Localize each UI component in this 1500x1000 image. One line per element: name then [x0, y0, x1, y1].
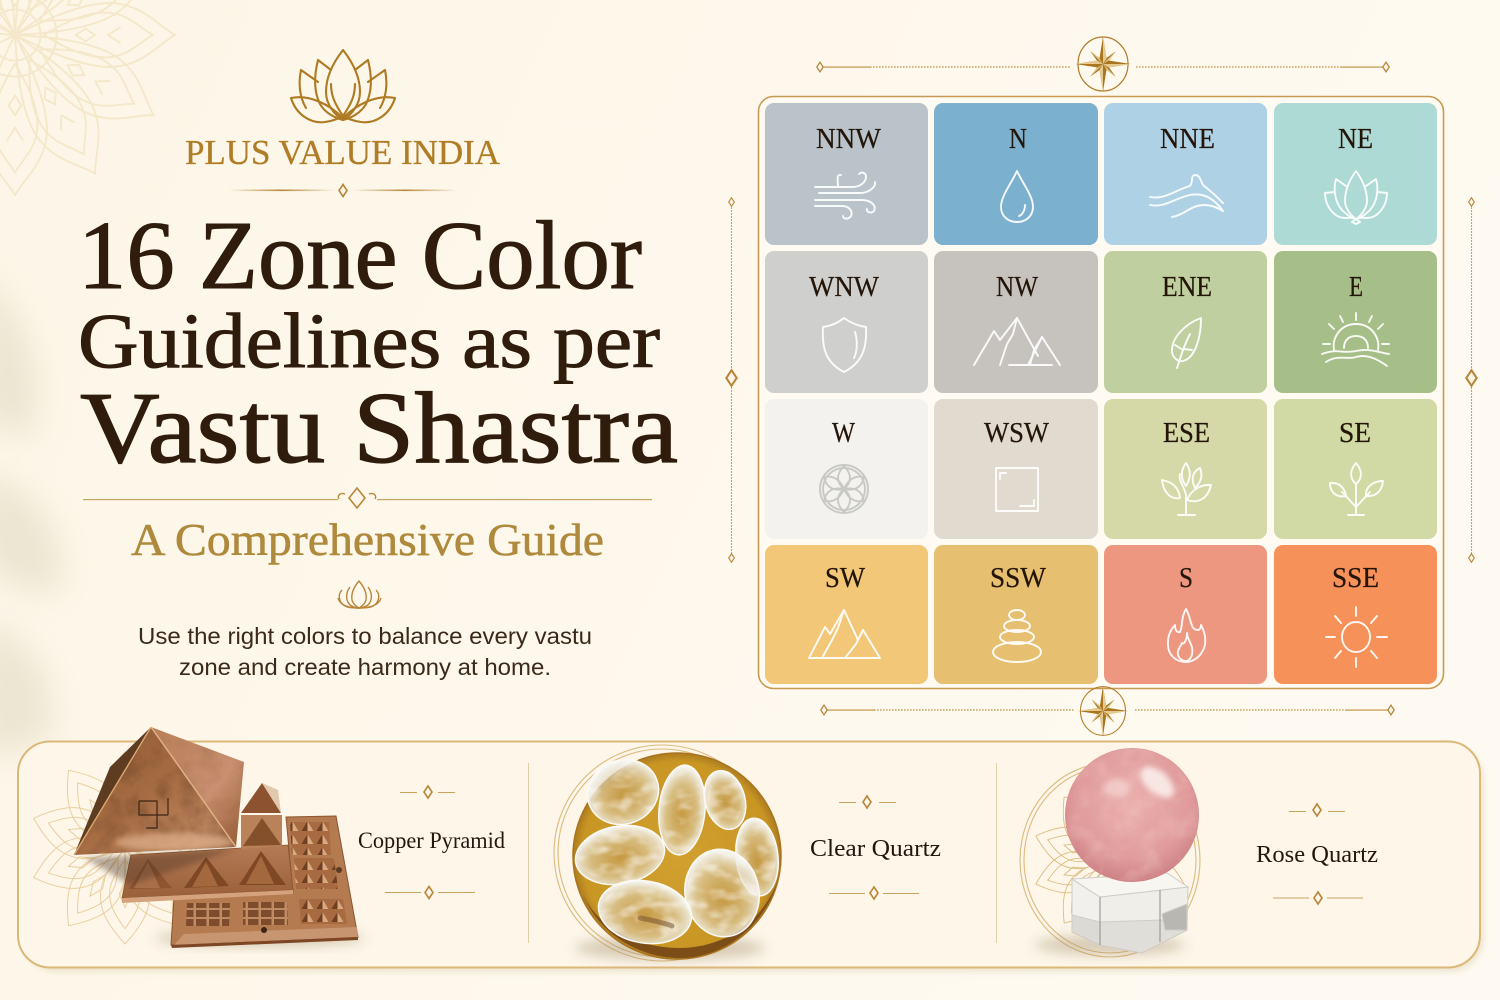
icon: water drop — [1001, 171, 1033, 222]
card: E — [1274, 251, 1437, 393]
crystal cube — [1072, 873, 1188, 953]
icon: sunrise — [1322, 313, 1389, 366]
icon: leaf — [1172, 318, 1201, 368]
card: WSW — [934, 399, 1098, 539]
stacked pyramids — [241, 783, 282, 849]
icon: stacked stones — [993, 610, 1041, 662]
ornament: bottom compass rule — [821, 686, 1394, 736]
icon: circular flower — [820, 465, 868, 513]
ornament: left rail — [726, 198, 737, 562]
title: 16 Zone Color — [78, 202, 642, 309]
card: SSE: SSE — [1332, 562, 1379, 594]
brand name: PLUS VALUE INDIA — [185, 133, 501, 172]
card: WNW — [765, 251, 928, 393]
icon: lotus — [1325, 171, 1387, 224]
card: NW — [934, 251, 1098, 393]
label: rose quartz — [1256, 804, 1378, 904]
ornament — [829, 887, 919, 899]
ornament — [385, 886, 475, 898]
card: SW — [765, 545, 928, 684]
icon: flame — [1168, 609, 1205, 662]
card: ENE — [1104, 251, 1267, 393]
label: copper pyramid: Copper Pyramid — [358, 828, 505, 853]
card: NE — [1274, 103, 1437, 245]
icon: mountains — [974, 318, 1060, 365]
icon: square — [996, 468, 1038, 511]
card: SSE — [1274, 545, 1437, 684]
card: W: W — [832, 417, 856, 449]
product: copper pyramid — [26, 727, 365, 948]
card: ESE: ESE — [1163, 417, 1210, 449]
bowl — [573, 753, 781, 959]
back plate — [171, 816, 358, 945]
card: WNW: WNW — [809, 271, 880, 303]
ornament — [839, 796, 896, 808]
shadow — [1035, 935, 1185, 955]
ornament: top compass rule — [817, 36, 1389, 92]
ornament — [1273, 892, 1363, 904]
icon: mountain — [809, 610, 880, 658]
card: SSW: SSW — [990, 562, 1047, 594]
shadow — [155, 930, 365, 946]
sphere — [1065, 748, 1199, 882]
icon: sprout — [1330, 463, 1383, 515]
card: NNE — [1104, 103, 1267, 245]
title: Vastu Shastra — [80, 372, 678, 485]
card: N — [934, 103, 1098, 245]
card: W — [765, 399, 928, 539]
card: ESE — [1104, 399, 1267, 539]
icon: shield — [823, 318, 866, 372]
card: NNE: NNE — [1160, 123, 1215, 155]
label: clear quartz: Clear Quartz — [810, 836, 941, 862]
card: S: S — [1179, 562, 1193, 594]
logo: lotus — [291, 50, 395, 122]
card: NW: NW — [996, 271, 1039, 303]
description text — [138, 623, 592, 680]
icon: small lotus — [338, 581, 381, 608]
mandala ring — [554, 745, 770, 961]
card: NNW — [765, 103, 928, 245]
ornament: right rail — [1466, 198, 1477, 562]
divider: brand — [229, 184, 458, 196]
shadow — [575, 936, 765, 960]
card: SSW — [934, 545, 1098, 684]
icon: sun — [1326, 607, 1387, 667]
icon: wave — [1150, 175, 1223, 217]
product: rose quartz sphere — [1020, 748, 1200, 957]
label: rose quartz: Rose Quartz — [1256, 842, 1378, 868]
description text: Use the right colors to balance every vastu — [138, 623, 592, 649]
panel: products — [18, 727, 1484, 972]
card: ENE: ENE — [1162, 271, 1212, 303]
mandala ring — [1020, 763, 1200, 957]
card: NNW: NNW — [816, 123, 882, 155]
panel: zone grid — [758, 96, 1444, 688]
label: clear quartz — [810, 796, 941, 899]
quartz stones — [571, 750, 782, 951]
card: SE — [1274, 399, 1437, 539]
card: SE: SE — [1339, 417, 1371, 449]
card: SW: SW — [825, 562, 866, 594]
mandala: top-left corner — [0, 0, 175, 195]
ornament — [1289, 804, 1345, 816]
mandala: behind pyramid — [26, 752, 224, 944]
large pyramid — [74, 727, 244, 855]
divider: title — [83, 488, 652, 508]
small pyramids — [129, 851, 286, 889]
subtitle: A Comprehensive Guide — [131, 514, 604, 565]
icon: plant — [1162, 463, 1211, 515]
title: Guidelines as per — [78, 297, 660, 384]
middle plate — [122, 845, 293, 898]
icon: wind — [815, 173, 875, 219]
card: S — [1104, 545, 1267, 684]
product: clear quartz bowl — [554, 745, 782, 961]
label: copper pyramid — [358, 786, 505, 898]
ornament — [400, 786, 455, 798]
card: WSW: WSW — [984, 417, 1050, 449]
decorative leaf shadows — [0, 270, 62, 760]
card: NE: NE — [1338, 123, 1373, 155]
card: N: N — [1009, 123, 1027, 155]
title — [78, 202, 678, 485]
stone highlights — [577, 762, 776, 941]
description text: zone and create harmony at home. — [179, 654, 551, 680]
card: E: E — [1349, 271, 1363, 303]
